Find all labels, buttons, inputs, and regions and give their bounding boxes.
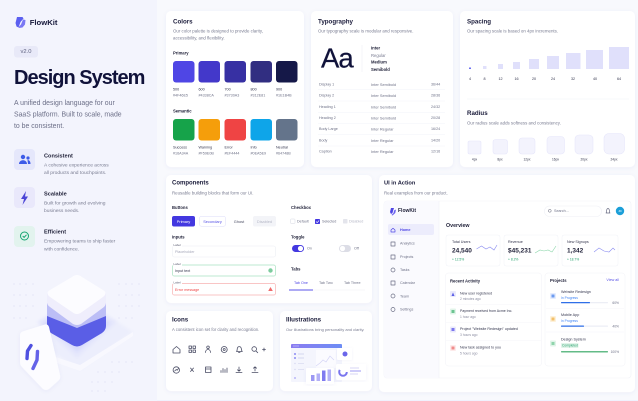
stat card: new signups: [562, 235, 618, 266]
icon: user: [206, 346, 210, 352]
intro paragraph: to be consistent.: [14, 123, 64, 130]
primary palette: #1E1B4B: [276, 94, 292, 98]
feature: Efficient: with confidence.: [44, 246, 79, 252]
type scale table: Inter Regular: [371, 138, 394, 143]
primary palette: 500: [173, 88, 179, 92]
type scale table: Inter Regular: [371, 149, 394, 154]
font specimen: [321, 42, 390, 74]
buttons: Ghost: [234, 219, 245, 224]
inputs: Error message: [175, 288, 199, 292]
font specimen: Regular: [371, 53, 386, 58]
feature: Consistent: all products and touchpoints.: [44, 170, 106, 176]
semantic palette: Semantic: [173, 108, 192, 114]
stat card: total users: + 12.5%: [452, 257, 464, 261]
intro paragraph: SaaS platform. Built to scale, made: [14, 112, 122, 118]
spacing scale: [469, 47, 629, 81]
toggle: Toggle: [291, 234, 305, 240]
recent activity card: New user registered: [460, 292, 492, 296]
spacing scale: 64: [617, 77, 621, 81]
type scale table: Heading 1: [319, 105, 336, 109]
description: Reusable building blocks that form our UI.: [172, 190, 254, 195]
recent activity card: 1 hour ago: [460, 315, 476, 319]
checkboxes: Disabled: [349, 219, 363, 223]
sidebar navigation: Tasks: [400, 268, 410, 272]
tabs: [289, 266, 365, 290]
primary palette: #312E81: [250, 94, 265, 98]
panel: hero sidebar: [0, 0, 157, 401]
spacing scale: 24: [551, 77, 555, 81]
tabs: Tab Three: [344, 281, 361, 285]
feature: Efficient: Empowering teams to ship faster: [44, 238, 116, 244]
spacing scale: 4: [469, 77, 471, 81]
illustration: isometric cube: [14, 275, 139, 391]
description: spacing: Our spacing scale is based on 4px increments.: [467, 28, 558, 34]
inputs: Inputs: [172, 234, 185, 240]
type scale table: Inter Regular: [371, 126, 394, 132]
recent activity card: New task assigned to you: [460, 345, 501, 349]
projects card: 40%: [612, 324, 619, 328]
type scale table: Inter Semibold: [371, 104, 396, 110]
inputs: Input text: [175, 269, 190, 273]
projects card: Website Redesign: [561, 290, 591, 294]
recent activity card: [446, 273, 542, 366]
semantic palette: Success: [173, 146, 187, 150]
logo: FlowKit: [16, 17, 58, 28]
type scale table: Inter Semibold: [371, 82, 396, 87]
inputs: Label: [174, 262, 181, 266]
inputs: Placeholder: [175, 250, 195, 254]
projects card: Projects: [550, 278, 567, 283]
projects card: 60%: [612, 301, 619, 305]
buttons: Disabled: [257, 219, 272, 224]
type scale table: Body: [319, 138, 328, 142]
icon: calendar: [206, 367, 211, 372]
projects card: View all: [606, 278, 619, 282]
recent activity card: Payment received from Acme Inc.: [460, 309, 512, 313]
primary palette: Primary: [173, 50, 189, 56]
stat card: revenue: $45,231: [508, 248, 532, 254]
heading: Typography: [318, 18, 354, 26]
inputs: Label: [174, 280, 181, 284]
stat card: revenue: + 8.2%: [508, 257, 518, 261]
buttons: Buttons: [172, 205, 188, 210]
icon: close: [190, 368, 194, 372]
recent activity card: Recent Activity: [450, 278, 481, 284]
recent activity card: 2 minutes ago: [460, 297, 481, 301]
feature: Consistent: [14, 149, 109, 176]
radius scale: 20px: [581, 158, 588, 162]
buttons: Secondary: [203, 219, 222, 224]
semantic palette: #16A34A: [173, 152, 189, 156]
radius scale: 24px: [611, 158, 618, 162]
panel: icons: [166, 311, 273, 391]
sidebar navigation: Home: [400, 228, 411, 232]
feature: Scalable: business needs.: [44, 208, 79, 214]
icon: trend circle: [173, 367, 180, 373]
type scale table: Heading 2: [319, 116, 336, 120]
logo: FlowKit: FlowKit: [30, 18, 58, 27]
sidebar navigation: Analytics: [400, 242, 415, 246]
checkboxes: Selected: [322, 219, 336, 223]
checkboxes: Default: [297, 219, 309, 223]
stat card: revenue: [504, 235, 558, 266]
app mockup frame: [384, 201, 631, 378]
icon: search: [252, 347, 258, 353]
type scale table: Caption: [319, 150, 332, 154]
projects card: Design System: [561, 338, 586, 342]
semantic palette: [173, 108, 298, 156]
primary palette: 800: [250, 88, 257, 92]
description: radius: Our radius scale adds softness and consistency.: [467, 120, 561, 126]
intro paragraph: A unified design language for our: [14, 100, 115, 107]
spacing scale: 16: [514, 77, 519, 81]
inputs: Label: [174, 243, 181, 247]
description: Our typography scale is modular and responsive.: [318, 28, 413, 34]
radius scale: 12px: [524, 158, 531, 162]
type scale table: 28/36: [431, 94, 440, 98]
type scale table: [318, 82, 445, 154]
tabs: Tabs: [291, 266, 301, 272]
feature: Scalable: [14, 187, 106, 214]
panel: colors: [166, 11, 304, 167]
type scale table: 16/24: [431, 127, 440, 131]
tabs: Tab Two: [319, 281, 333, 285]
icon: bell: [236, 347, 242, 352]
description: Our color palette is designed to provide clarity,: [173, 28, 263, 34]
avatar: JD: [618, 209, 622, 213]
panel: illustrations: [280, 311, 372, 391]
font specimen: Semibold: [371, 67, 390, 72]
type scale table: Display 2: [319, 94, 334, 98]
stat card: total users: 24,540: [452, 248, 472, 254]
panel: typography: [311, 11, 453, 167]
primary palette: [173, 50, 298, 98]
illustration: dashboard mockup: [291, 344, 366, 384]
type scale table: 24/32: [431, 105, 440, 109]
heading: UI in Action: [384, 180, 416, 186]
buttons: [172, 205, 276, 226]
semantic palette: Neutral: [276, 146, 288, 150]
avatar: [616, 207, 624, 215]
toggle: On: [307, 246, 312, 250]
primary palette: #4338CA: [198, 94, 214, 98]
description: Real examples from our product.: [384, 190, 448, 195]
primary palette: 600: [198, 88, 205, 92]
stat card: total users: Total Users: [452, 240, 471, 244]
stat card: new signups: + 18.7%: [567, 257, 579, 261]
sidebar navigation: Calendar: [400, 281, 416, 285]
projects card: Completed: [562, 344, 578, 348]
spacing scale: 8: [483, 77, 486, 81]
heading: radius: Radius: [467, 110, 488, 117]
feature: Consistent: A cohesive experience across: [44, 162, 109, 168]
semantic palette: Warning: [198, 146, 212, 150]
projects card: [545, 273, 625, 366]
description: [173, 28, 263, 40]
sidebar navigation: Settings: [400, 308, 413, 312]
sidebar navigation: Team: [400, 294, 409, 298]
recent activity card: Project "Website Redesign" updated: [460, 327, 518, 331]
semantic palette: #EF4444: [224, 152, 239, 156]
icon: grid: [189, 346, 196, 352]
description: accessibility, and flexibility.: [173, 36, 225, 40]
type scale table: 20/28: [431, 116, 440, 120]
spacing scale: 20: [532, 77, 536, 81]
icon: notification bell: [606, 208, 610, 213]
projects card: In Progress: [561, 319, 578, 323]
radius scale: [468, 134, 624, 162]
spacing scale: 32: [571, 77, 575, 81]
type scale table: Body Large: [319, 127, 338, 131]
projects card: In Progress: [561, 296, 578, 300]
overview heading: Overview: [446, 223, 470, 229]
type scale table: Display 1: [319, 82, 334, 86]
tabs: Tab One: [294, 281, 308, 285]
description: Our illustrations bring personality and clarity.: [286, 327, 364, 332]
icon: download: [236, 367, 242, 372]
icon: plus: [262, 348, 266, 351]
semantic palette: Error: [224, 146, 233, 150]
checkboxes: [290, 205, 363, 224]
sidebar navigation: FlowKit: [398, 208, 416, 214]
toggle: [291, 234, 360, 252]
font specimen: Medium: [371, 60, 387, 64]
buttons: Primary: [177, 219, 190, 224]
primary palette: #4F46E5: [173, 94, 188, 98]
feature: Scalable: Scalable: [44, 191, 67, 197]
feature: Consistent: Consistent: [44, 153, 73, 159]
description: A consistent icon set for clarity and recognition.: [172, 327, 259, 332]
heading: Illustrations: [286, 316, 322, 324]
sidebar navigation: Projects: [400, 255, 413, 259]
semantic palette: Info: [250, 146, 257, 150]
checkboxes: Checkbox: [291, 205, 312, 210]
heading: Icons: [172, 316, 189, 324]
type scale table: 36/44: [431, 82, 440, 86]
panel: spacing and radius: [460, 11, 635, 167]
stat card: total users: [446, 235, 500, 266]
stat card: new signups: New Signups: [567, 240, 589, 244]
projects card: 100%: [611, 350, 619, 354]
recent activity card: 5 hours ago: [460, 351, 478, 355]
font specimen: Aa: [321, 42, 354, 74]
spacing scale: 40: [593, 77, 597, 81]
spacing scale: 12: [498, 77, 503, 81]
primary palette: 700: [224, 88, 231, 92]
search bar: [544, 206, 602, 216]
inputs: [172, 234, 276, 295]
icon: upload: [252, 367, 258, 372]
icon: settings: [221, 346, 227, 352]
semantic palette: #64748B: [276, 152, 291, 156]
projects card: Mobile App: [561, 313, 579, 317]
type scale table: 14/20: [431, 138, 440, 142]
icon: chart: [221, 368, 227, 372]
semantic palette: #0EA5E9: [250, 152, 266, 156]
search bar: Search...: [554, 209, 569, 213]
heading: spacing: Spacing: [467, 18, 491, 26]
heading: Components: [172, 180, 209, 186]
feature: Efficient: [14, 226, 116, 252]
stat card: new signups: 1,342: [567, 248, 584, 254]
stat card: revenue: Revenue: [508, 240, 523, 244]
font specimen: Inter: [371, 46, 380, 50]
recent activity card: 3 hours ago: [460, 333, 478, 337]
version badge: v2.0: [21, 49, 31, 55]
toggle: Off: [354, 246, 360, 250]
icon: home: [173, 346, 180, 353]
sidebar navigation: [384, 201, 439, 378]
version badge: [14, 46, 38, 58]
radius scale: 16px: [552, 158, 559, 162]
panel: components: [166, 175, 372, 303]
primary palette: 900: [276, 88, 282, 92]
radius scale: 4px: [472, 158, 477, 162]
primary palette: #3730A3: [224, 94, 239, 98]
type scale table: Inter Semibold: [371, 93, 396, 98]
feature: Scalable: Built for growth and evolving: [44, 200, 106, 206]
main title: Design System: [14, 67, 145, 89]
feature: Efficient: Efficient: [44, 230, 66, 236]
intro paragraph: [14, 100, 122, 130]
radius scale: 8px: [497, 158, 503, 162]
type scale table: 12/16: [431, 150, 440, 154]
heading: Colors: [173, 18, 193, 26]
type scale table: Inter Semibold: [371, 116, 396, 120]
panel: UI in action: [379, 175, 635, 392]
icon grid: [173, 346, 266, 373]
semantic palette: #F59E0B: [198, 152, 214, 156]
